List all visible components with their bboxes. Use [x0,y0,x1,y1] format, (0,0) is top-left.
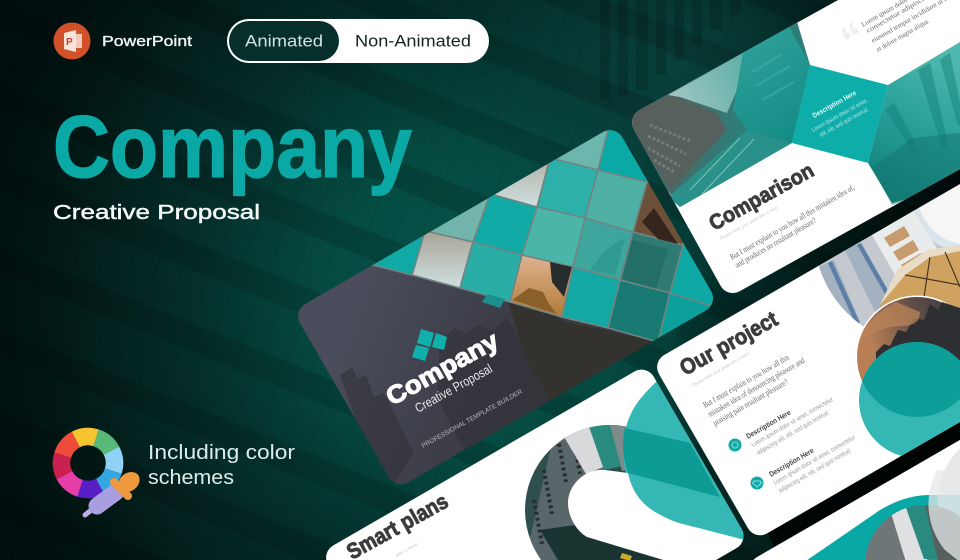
icon: diamond [750,476,764,490]
teal band [623,428,720,497]
teal description tile: elit, elit, sed quis nostrud. [819,107,870,139]
smart plans subtitle: title is here [395,541,419,558]
building photo [818,184,960,326]
grey overlay [928,470,960,560]
teal band [807,495,938,560]
comparison body [728,182,856,270]
caption: color schemes [148,442,295,489]
cover title: Company [381,327,503,411]
cover tagline: PROFESSIONAL TEMPLATE BUILDER [421,388,524,450]
teal circle [859,342,960,458]
our project heading: Our project [675,306,782,380]
description two: Description Here [768,446,815,479]
city skyline [340,302,652,482]
our project subtitle: Please write your great title is here [691,351,750,388]
tile photo details [482,208,678,314]
diamond tiles [372,130,713,342]
description two: Lorem ipsum dolor sit amet, consectetur [772,434,857,487]
white blob [568,470,705,560]
white arc [919,184,960,244]
quote text [860,0,948,52]
comparison heading: Comparison [705,159,818,235]
subtitle: Creative Proposal [53,201,260,224]
teal description tile: Description Here [812,90,858,120]
building photo circle [860,499,960,560]
description one: adipiscing elit, elit, sed quis nostrud. [756,409,831,457]
description one: Lorem ipsum dolor sit amet, consectetur [750,396,835,449]
forest photo [868,30,960,205]
street photo [625,15,810,207]
panel: fourth slide [754,440,960,560]
comparison subtitle: Please write your great title is here [719,205,779,241]
logo: PowerPoint: P [66,37,73,48]
logo: PowerPoint [54,22,192,60]
cover logo [412,329,447,361]
grey circle [944,448,960,470]
icon: target [728,438,742,452]
teal leaf shape [624,382,744,540]
comparison body: But I must explain to you how all this mistaken idea of, [728,182,856,262]
description two: adipiscing elit, elit, sed quis nostrud. [778,447,853,495]
translucent overlay [937,495,960,530]
panel: smart plans slide [326,370,744,560]
teal overlap [862,342,960,417]
our project body: praising pain resultant pleasure? [711,376,790,428]
teal description tile: Lorem ipsum dolor sit amet, [811,98,869,134]
icon: quote mark: “ [833,13,875,64]
toggle: Animated / Non-Animated: Animated [245,32,323,50]
our project body: But I must explain to you how all this [701,352,791,410]
teal description tile [792,65,888,163]
description one: Description Here [744,408,792,441]
our project body: mistaken idea of denouncing pleasure and [706,355,807,419]
panel: our project slide [657,184,960,536]
toggle: Animated / Non-Animated: Non-Animated [355,32,471,50]
caption: color schemes: schemes [148,467,234,489]
panel: cover slide [298,130,713,484]
panel: comparison slide [632,0,960,293]
cover subtitle: Creative Proposal [412,361,495,416]
building photo circle [525,425,694,560]
comparison body: and produces no resultant pleasure? [733,215,818,270]
logo: PowerPoint: PowerPoint [102,34,192,50]
icon: color wheel with dropper [52,427,144,515]
title: Company [53,97,412,196]
quote text: et dolore magna aliqua. [875,17,931,54]
toggle: Animated / Non-Animated [227,19,489,63]
skyline circle photo [857,296,960,382]
caption: color schemes: Including color [148,442,295,464]
